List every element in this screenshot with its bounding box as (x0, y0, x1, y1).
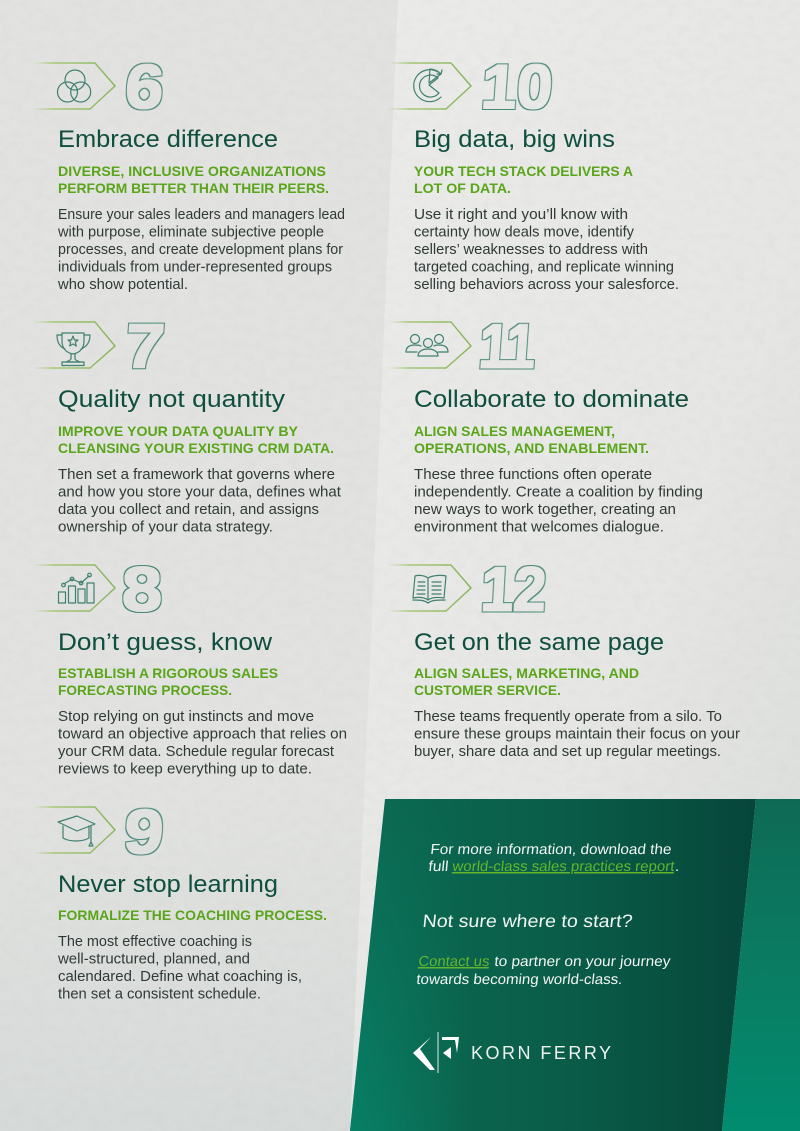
body text (58, 709, 347, 778)
logo: Korn Ferry: KORN FERRY (471, 1043, 611, 1063)
body text: who show potential. (57, 277, 188, 293)
body text: toward an objective approach that relies on (58, 726, 347, 742)
body text: buyer, share data and set up regular meetings. (414, 744, 721, 760)
body text: Then set a framework that governs where (58, 467, 335, 483)
subheading: ALIGN SALES MANAGEMENT, (414, 423, 615, 439)
text: contact us (416, 954, 672, 988)
text: contact us: to partner on your journey (494, 954, 672, 970)
body text: reviews to keep everything up to date. (58, 762, 312, 778)
body text (414, 467, 703, 536)
body text: independently. Create a coalition by finding (414, 484, 703, 500)
heading: Never stop learning (58, 871, 278, 898)
section 7: quality not quantity (32, 313, 341, 536)
section 9: never stop learning (32, 798, 327, 1002)
heading: Get on the same page (414, 629, 664, 656)
body text: and how you store your data, defines what (58, 484, 341, 500)
body text: processes, and create development plans for (58, 242, 343, 258)
text: more information (428, 842, 679, 875)
body text (414, 709, 740, 760)
icon: trophy in arrow (32, 322, 115, 368)
section 12: get on the same page (388, 556, 740, 760)
body text (414, 207, 679, 293)
subheading (58, 163, 329, 196)
icon: venn circles in arrow (32, 63, 115, 109)
subheading (58, 423, 334, 456)
heading: Embrace difference (58, 126, 278, 153)
body text: calendared. Define what coaching is, (58, 969, 302, 985)
number 10: 10 (479, 53, 555, 122)
body text: These teams frequently operate from a silo. To (414, 709, 722, 725)
number 11: 11 (477, 313, 538, 381)
body text: your CRM data. Schedule regular forecast (58, 744, 334, 760)
number 8: 8 (122, 556, 162, 624)
body text: The most effective coaching is (58, 934, 252, 950)
text: more information: full (428, 859, 449, 875)
body text: new ways to work together, creating an (414, 502, 676, 518)
section 11: collaborate to dominate (388, 313, 703, 536)
number 9: 9 (122, 798, 166, 867)
body text: with purpose, eliminate subjective people (57, 224, 324, 240)
icon: open book in arrow (388, 565, 471, 611)
body text: individuals from under-represented groups (58, 260, 332, 276)
body text: data you collect and retain, and assigns (58, 502, 319, 518)
body text (58, 467, 341, 536)
icon: bar chart with trend line in arrow (32, 565, 115, 611)
icon: three people in arrow (388, 322, 471, 368)
heading: Quality not quantity (58, 386, 285, 413)
body text: ensure these groups maintain their focus on your (414, 726, 740, 742)
subheading (414, 423, 649, 456)
subheading: IMPROVE YOUR DATA QUALITY BY (58, 423, 299, 439)
heading: Big data, big wins (414, 126, 615, 153)
subheading: FORECASTING PROCESS. (58, 682, 232, 698)
text: more information: For more information, download the (430, 842, 672, 858)
body text (57, 207, 345, 293)
subheading: FORMALIZE THE COACHING PROCESS. (58, 907, 327, 923)
subheading: CUSTOMER SERVICE. (414, 682, 561, 698)
subheading: DIVERSE, INCLUSIVE ORGANIZATIONS (58, 163, 326, 179)
subheading: ESTABLISH A RIGOROUS SALES (58, 665, 278, 681)
number 7: 7 (123, 313, 167, 381)
icon: graduation cap in arrow (32, 807, 115, 853)
body text: well-structured, planned, and (57, 952, 250, 968)
body text: Stop relying on gut instincts and move (58, 709, 314, 725)
body text: then set a consistent schedule. (58, 986, 261, 1002)
body text: ownership of your data strategy. (58, 520, 273, 536)
subheading: OPERATIONS, AND ENABLEMENT. (414, 440, 649, 456)
number 6: 6 (123, 53, 166, 122)
heading: not sure where to start: Not sure where to start? (422, 911, 634, 931)
body text: Use it right and you’ll know with (414, 207, 628, 223)
text: more information: . (675, 859, 679, 875)
subheading: YOUR TECH STACK DELIVERS A (414, 163, 633, 179)
body text: certainty how deals move, identify (414, 224, 635, 240)
icon: pie chart in arrow (388, 63, 471, 109)
subheading (414, 665, 639, 698)
body text: environment that welcomes dialogue. (414, 520, 664, 536)
text: more information: world-class sales practices report (451, 859, 675, 875)
number 12: 12 (479, 556, 548, 624)
text: contact us: Contact us (418, 954, 490, 970)
body text (57, 934, 302, 1002)
subheading: PERFORM BETTER THAN THEIR PEERS. (58, 180, 329, 196)
section 6: embrace difference (32, 53, 345, 293)
subheading (414, 163, 633, 196)
section 8: don't guess, know (32, 556, 347, 778)
body text: These three functions often operate (414, 467, 652, 483)
subheading (58, 665, 278, 698)
body text: selling behaviors across your salesforce. (414, 277, 679, 293)
text: contact us: towards becoming world-class. (416, 972, 623, 988)
subheading: LOT OF DATA. (414, 180, 511, 196)
section 10: big data, big wins (388, 53, 679, 293)
body text: sellers’ weaknesses to address with (414, 242, 648, 258)
body text: Ensure your sales leaders and managers lead (58, 207, 345, 223)
body text: targeted coaching, and replicate winning (414, 260, 674, 276)
logo: Korn Ferry (413, 1032, 611, 1073)
panel: call to action (350, 799, 800, 1131)
subheading: CLEANSING YOUR EXISTING CRM DATA. (58, 440, 334, 456)
subheading: ALIGN SALES, MARKETING, AND (414, 665, 639, 681)
panel background (350, 799, 800, 1131)
heading: Don’t guess, know (58, 629, 273, 656)
heading: Collaborate to dominate (414, 386, 689, 413)
